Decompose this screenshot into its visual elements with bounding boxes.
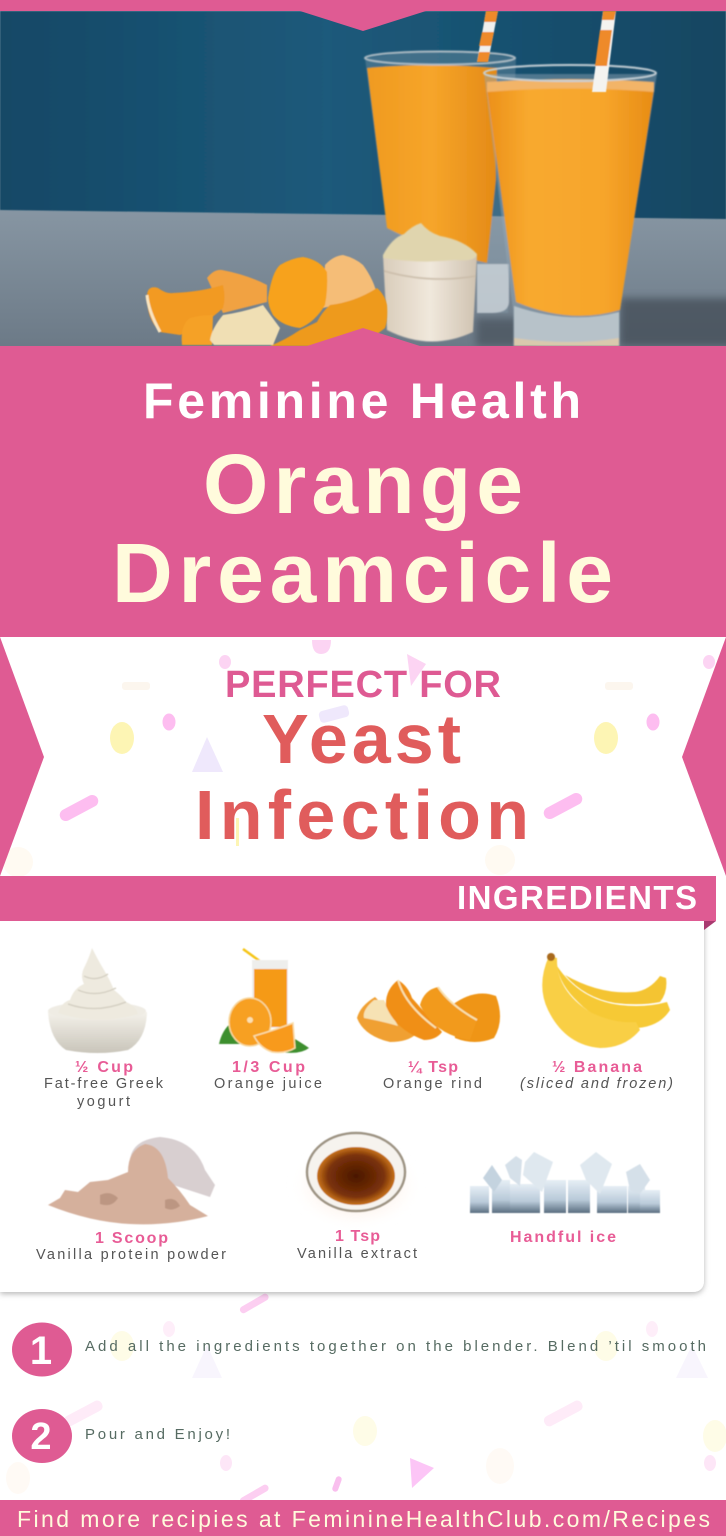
right ribbon cut <box>682 637 726 876</box>
title: Dreamcicle: Dreamcicle <box>112 526 613 620</box>
heading: yeast: Yeast <box>262 700 461 778</box>
icon: yogurt bowl <box>48 948 147 1053</box>
number badge 2: 2 <box>30 1416 52 1458</box>
right glass <box>484 65 657 346</box>
text: orange juice: Orange juice <box>214 1076 322 1092</box>
text: sliced and frozen: (sliced and frozen) <box>520 1076 673 1092</box>
icon: glass of juice with orange <box>219 949 309 1053</box>
top pink bar with notch <box>0 0 726 31</box>
text: vanilla extract: Vanilla extract <box>297 1246 417 1262</box>
step text 1: Add all the ingredients together on the blender. Blend ’til smooth <box>85 1338 706 1355</box>
label: half banana: ½ Banana <box>552 1059 642 1076</box>
peeled tangerine <box>147 255 387 346</box>
item: orange juice <box>214 949 322 1092</box>
text: fat-free greek yogurt: Fat-free Greek <box>44 1076 164 1092</box>
step 2 <box>12 1409 230 1463</box>
confetti in ribbon <box>3 640 715 877</box>
step text 2: Pour and Enjoy! <box>85 1426 230 1443</box>
left glass <box>365 52 516 313</box>
left ribbon cut <box>0 637 44 876</box>
icon: bowl of vanilla extract <box>286 1133 426 1233</box>
footer text: Find more recipies at FeminineHealthClub.com/Recipes <box>17 1506 710 1532</box>
icon: bananas <box>542 953 670 1048</box>
background confetti lower section <box>6 1292 726 1505</box>
text: orange rind: Orange rind <box>383 1076 482 1092</box>
scoop of powder <box>383 223 477 342</box>
label: one scoop: 1 Scoop <box>95 1230 168 1247</box>
label: one teaspoon: 1 Tsp <box>335 1228 380 1245</box>
label: quarter teaspoon: ¼ Tsp <box>408 1059 458 1076</box>
text: fat-free greek yogurt: yogurt <box>77 1094 130 1110</box>
icon: protein powder with scoop <box>48 1137 215 1224</box>
item: yogurt <box>44 948 164 1110</box>
subtitle: Feminine Health: Feminine Health <box>143 373 581 429</box>
number badge 1: 1 <box>30 1329 52 1373</box>
icon: orange peel spiral <box>357 980 500 1042</box>
item: protein powder <box>36 1137 226 1263</box>
heading: perfect for: PERFECT FOR <box>225 664 501 706</box>
ribbon panel: perfect for <box>0 637 726 877</box>
text: fat-free greek yogurt <box>44 1076 164 1110</box>
item: orange rind <box>357 980 500 1092</box>
text: vanilla protein powder: Vanilla protein powder <box>36 1247 226 1263</box>
ingredients card <box>0 921 704 1292</box>
icon: ice cubes <box>470 1152 660 1213</box>
step 1 <box>12 1322 706 1376</box>
label: one third cup: 1/3 Cup <box>232 1059 305 1076</box>
number badge 2 <box>12 1409 72 1463</box>
title panel <box>0 328 726 637</box>
title: Orange: Orange <box>203 437 523 531</box>
label: half cup: ½ Cup <box>75 1059 133 1076</box>
label: handful ice: Handful ice <box>510 1229 616 1246</box>
item: vanilla extract <box>286 1133 426 1262</box>
heading: ingredients: INGREDIENTS <box>457 879 697 916</box>
number badge 1 <box>12 1322 72 1376</box>
hero photo: smoothies on table <box>0 11 726 346</box>
right straw <box>592 11 616 92</box>
footer bar <box>0 1500 726 1536</box>
left straw <box>477 11 498 62</box>
item: banana <box>520 953 673 1092</box>
item: ice <box>470 1152 660 1246</box>
heading: infection: Infection <box>195 776 529 854</box>
ingredients header bar <box>0 876 716 930</box>
